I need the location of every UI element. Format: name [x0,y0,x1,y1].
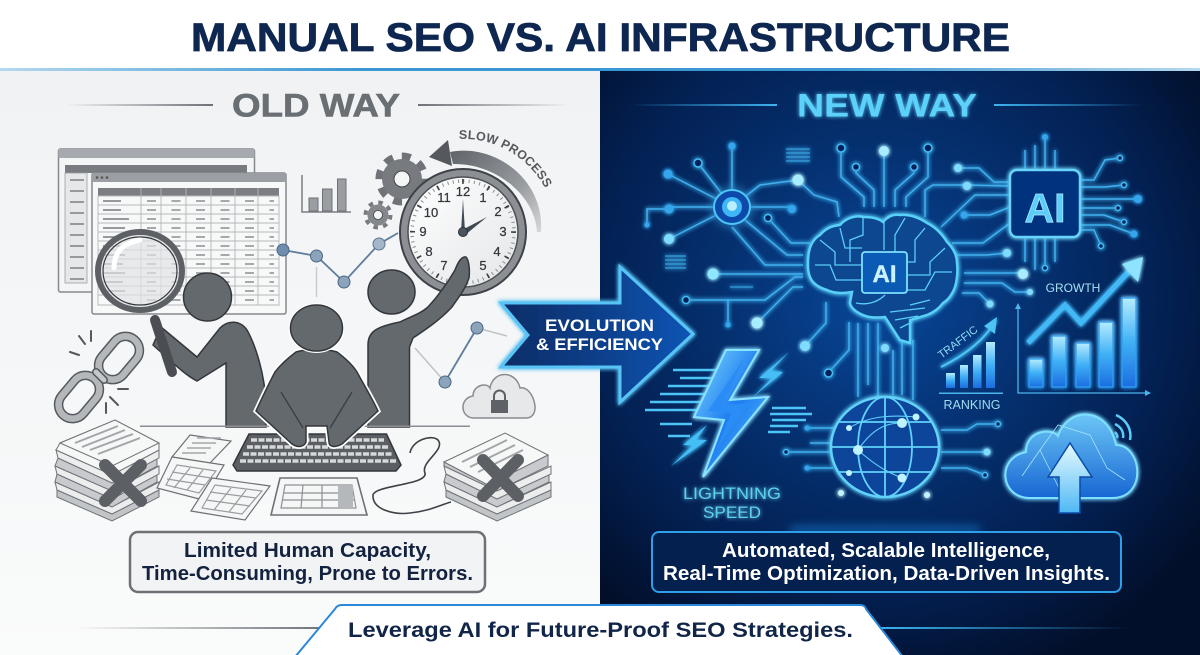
chart: growth: GROWTH [1046,281,1100,295]
background: header [0,0,1200,70]
icon: AI processor chip [1010,170,1080,237]
header rule [0,68,1200,71]
figure: person pointing at clock [368,257,469,427]
icon: cloud with lock [463,374,535,418]
line chart: lower trend [415,322,507,388]
label: lightning speed [683,484,781,522]
label: slow process: SLOW PROCESS [459,130,552,187]
icon: small gear [366,202,390,228]
line chart: upper trend [277,233,398,297]
icon: x mark right [483,460,518,496]
footer rule left [75,627,325,629]
icon: brain with AI chip: AI [872,261,896,288]
arrow: evolution and efficiency: EVOLUTION [545,316,654,335]
diagram: circuit network [647,137,1138,475]
icon: clock: 7 [440,258,448,273]
arrow: slow process arc [429,140,541,232]
glow above callout [790,527,980,533]
callout: new way summary: Real-Time Optimization, Data-Driven Insights. [663,563,1110,585]
icon: back spreadsheet window [58,149,254,292]
callout: old way summary [130,532,485,592]
chart: growth [1015,257,1151,396]
icon: hub node [714,190,750,224]
footer banner: Leverage AI for Future-Proof SEO Strategies. [348,619,853,642]
label: lightning speed: LIGHTNING [683,484,781,503]
arrow: evolution and efficiency [501,267,693,402]
icon: clock: 8 [425,244,433,259]
footer banner [295,605,903,655]
callout: new way summary [652,532,1121,592]
heading: new way: NEW WAY [797,88,977,124]
callout: old way summary: Time-Consuming, Prone to Errors. [142,563,473,585]
panel: old way background [0,70,600,655]
icon: clock: 5 [479,258,487,273]
icon: cloud with upload arrow [1005,415,1137,513]
icon: large gear [379,156,425,202]
label: lightning speed: SPEED [703,503,761,522]
icon: front spreadsheet window [92,173,286,314]
chart: traffic and ranking: TRAFFIC [936,324,980,361]
icon: clock: 1 [479,190,487,205]
title: MANUAL SEO VS. AI INFRASTRUCTURE [191,16,1010,60]
icon: clock [400,169,526,295]
icon: paper stack left [55,420,159,521]
panel: old way [54,88,560,594]
panel: new way [501,88,1151,592]
callout: new way summary: Automated, Scalable Intelligence, [722,540,1050,562]
heading: old way: OLD WAY [232,88,400,124]
diagram: circuit nodes [644,134,1142,478]
icon: lightning bolts [645,350,812,477]
cable [373,438,451,513]
icon: clock: 11 [437,190,451,205]
icon: clock: 12 [456,184,470,199]
icon: keyboard [233,434,401,471]
icon: magnifying glass [98,232,182,372]
figure: person at keyboard [256,305,378,446]
chart: traffic and ranking: RANKING [944,398,1000,412]
icon: broken chain [53,331,145,424]
callout: old way summary: Limited Human Capacity, [184,540,431,562]
icon: clock: 3 [499,224,507,239]
icon: globe [831,397,939,498]
desk line [140,426,470,427]
icon: x mark left [105,465,141,501]
icon: clock: 9 [419,224,427,239]
icon: clock: 4 [493,244,501,259]
footer rule right [880,627,1130,629]
icon: scattered spreadsheets [157,435,367,520]
icon: clock: 2 [494,204,502,219]
icon: small bar chart [302,175,351,212]
icon: paper stack right [444,433,551,521]
chart: traffic and ranking [936,317,1003,412]
panel: new way background [600,70,1200,655]
icon: AI processor chip: AI [1024,185,1066,231]
arrow: evolution and efficiency: & EFFICIENCY [536,335,664,354]
icon: clock: 10 [424,205,438,220]
icon: brain with AI chip [808,215,957,343]
figure: person with magnifier [153,273,266,427]
